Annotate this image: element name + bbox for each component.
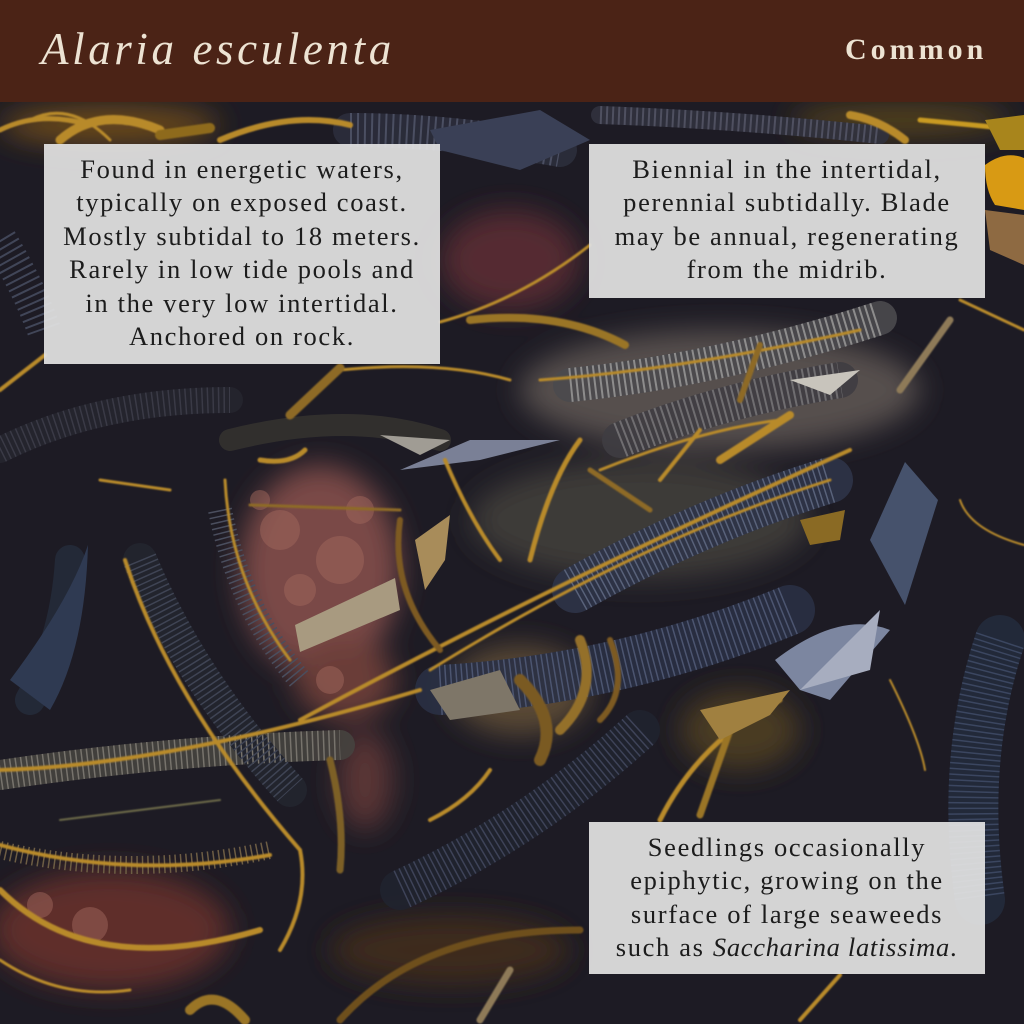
text box: life cycle xyxy=(589,144,985,298)
text box: life cycle: Biennial in the intertidal, xyxy=(632,154,942,184)
text box: seedlings: Seedlings occasionally xyxy=(648,832,926,862)
ribbed texture on blades xyxy=(0,115,1000,900)
blue-grey glossy blades xyxy=(10,110,938,710)
text box: habitat xyxy=(44,144,440,364)
reddish rock texture xyxy=(27,490,374,943)
text box: habitat: in the very low intertidal. xyxy=(85,288,399,318)
text box: habitat: Mostly subtidal to 18 meters. xyxy=(63,221,421,251)
text box: seedlings: such as Saccharina latissima. xyxy=(616,932,958,962)
pale tan blade and highlights xyxy=(295,370,860,740)
text box: habitat: Rarely in low tide pools and xyxy=(69,254,415,284)
text box: habitat: typically on exposed coast. xyxy=(76,187,408,217)
text box: life cycle: may be annual, regenerating xyxy=(615,221,959,251)
text box: life cycle: perennial subtidally. Blade xyxy=(623,187,951,217)
status label: Common xyxy=(845,33,987,66)
text box: seedlings: surface of large seaweeds xyxy=(631,899,943,929)
yellow bulb top right xyxy=(985,155,1024,210)
text box: habitat: Found in energetic waters, xyxy=(80,154,404,184)
title: Alaria esculenta xyxy=(41,24,395,74)
text box: seedlings: epiphytic, growing on the xyxy=(630,865,944,895)
header bar xyxy=(0,0,1024,102)
text box: habitat: Anchored on rock. xyxy=(129,321,355,351)
text box: life cycle: from the midrib. xyxy=(687,254,887,284)
text box: seedlings xyxy=(589,822,985,974)
solid blade bodies xyxy=(0,115,1000,900)
